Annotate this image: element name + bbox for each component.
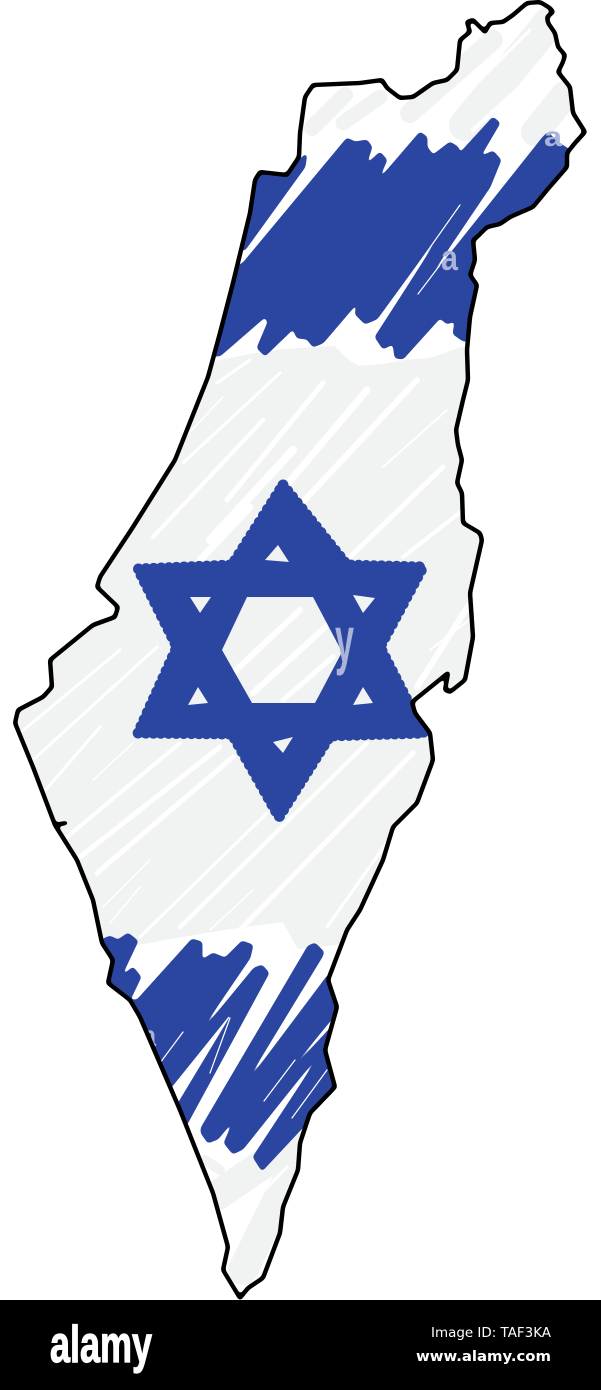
blue band: bottom slits: [160, 1017, 327, 1118]
watermark letters: y: [335, 603, 354, 676]
image id text: Image ID: TAF3KA: [431, 1325, 552, 1341]
watermark letters: a: [544, 121, 562, 152]
star of David: [135, 484, 426, 820]
grey scribble: top area: [312, 22, 565, 132]
white streaks: [20, 30, 553, 1233]
logo text: alamy: [50, 1316, 152, 1374]
grey scribble: central field: [0, 345, 490, 950]
watermark letters: [143, 121, 562, 1053]
footer bar: [0, 1300, 601, 1390]
blue band: top slits: [400, 205, 460, 294]
star scalloped edge: [138, 485, 424, 817]
watermark letters: a: [441, 237, 459, 278]
grey scribble: bottom tip: [205, 1140, 298, 1270]
blue band: top: [216, 118, 568, 360]
blue band: bottom: [95, 933, 345, 1171]
star body: [146, 494, 425, 807]
watermark letters: a: [143, 1020, 156, 1053]
website text: www.alamy.com: [416, 1349, 551, 1365]
